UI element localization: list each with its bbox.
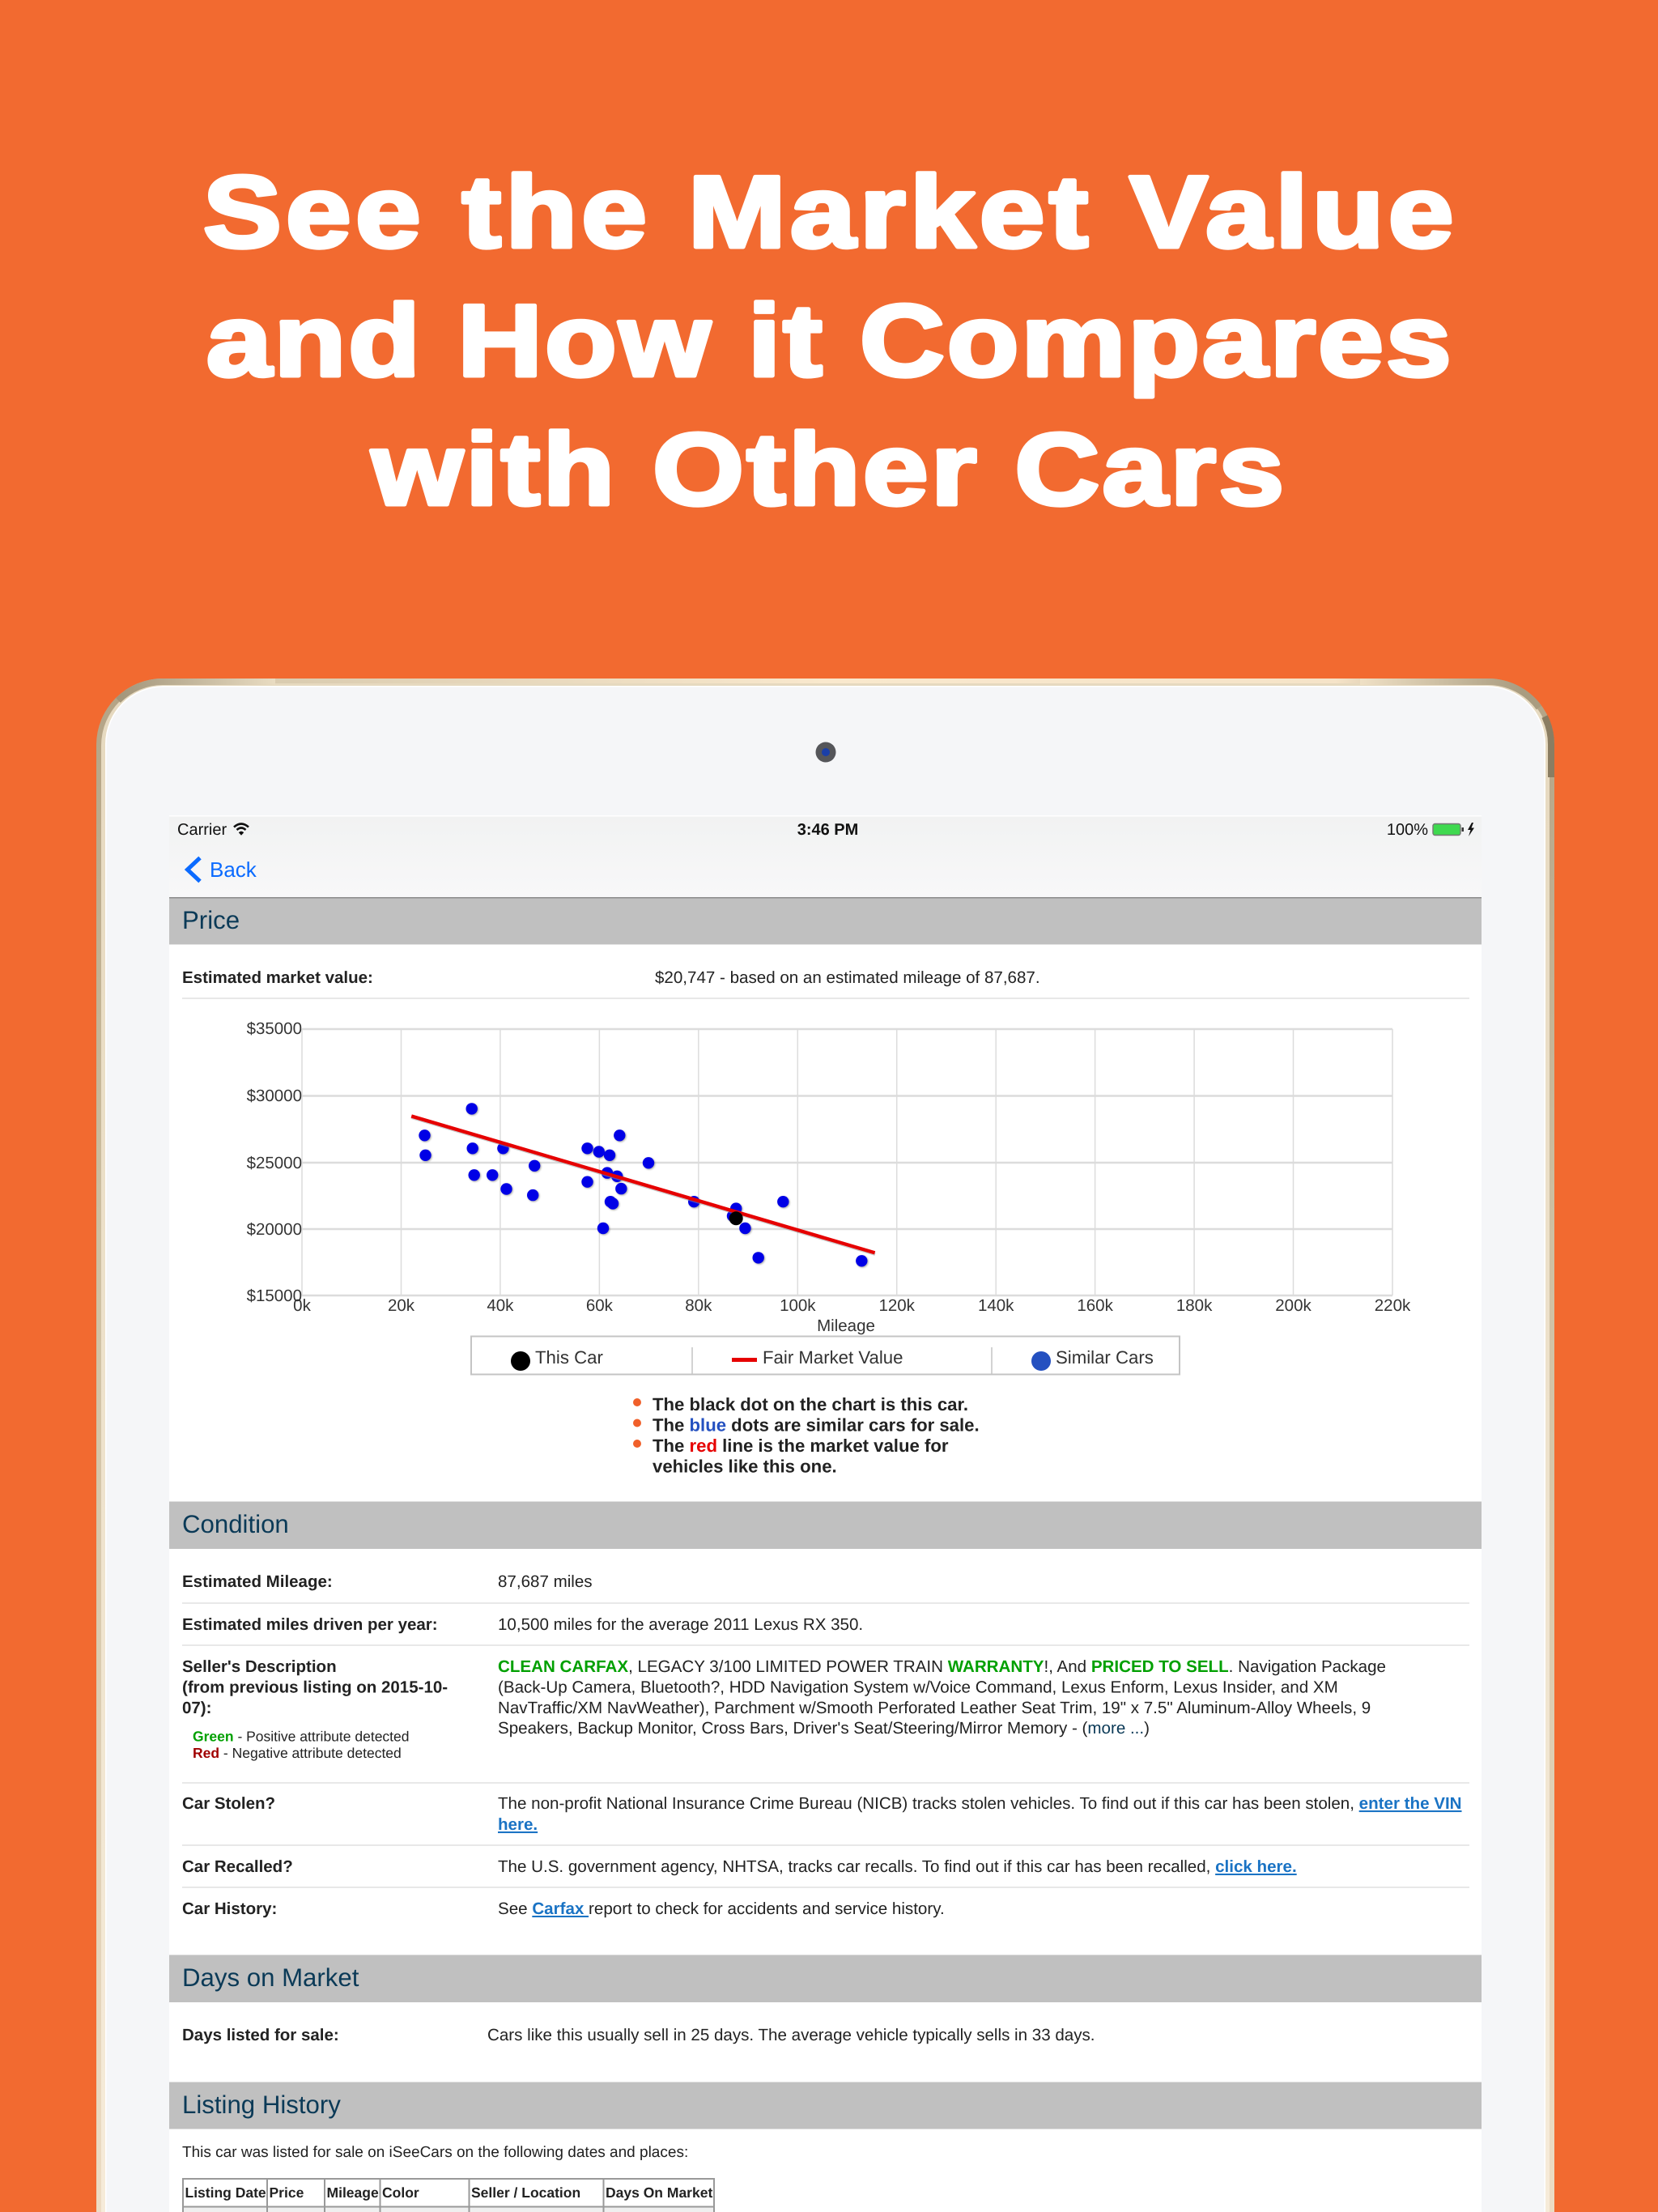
heading: condition: [169, 1501, 1482, 1549]
row: seller's description: 07):: [182, 1699, 211, 1717]
title: [203, 155, 1453, 526]
legend: fair market value: Fair Market Value: [763, 1347, 903, 1368]
x axis labels: 100k: [780, 1296, 816, 1315]
row: car history: Car History:: [182, 1899, 277, 1918]
table header row: Color: [382, 2184, 419, 2201]
x axis labels: [293, 1296, 1411, 1315]
table header row: Mileage: [327, 2184, 379, 2201]
row: miles per year: [182, 1615, 863, 1634]
row: estimated mileage: [182, 1572, 593, 1591]
status: time: 3:46 PM: [797, 821, 858, 839]
chart explanation bullets: The black dot on the chart is this car.: [653, 1394, 968, 1414]
x axis labels: 20k: [388, 1296, 415, 1315]
row: days listed for sale: Days listed for sale:: [182, 2026, 339, 2044]
row: car history: [182, 1899, 945, 1918]
table header row: Listing Date: [185, 2184, 266, 2201]
fair market value line: [411, 1116, 875, 1254]
listing intro text: This car was listed for sale on iSeeCars on the following dates and places:: [182, 2144, 688, 2161]
title: with Other Cars: [371, 412, 1284, 526]
legend: this car: [511, 1347, 603, 1371]
row: seller's description: Seller's Description: [182, 1657, 337, 1676]
x axis labels: 180k: [1176, 1296, 1213, 1315]
row: car history: See Carfax report to check for accidents and service history.: [498, 1899, 945, 1918]
legend: this car: This Car: [535, 1347, 603, 1368]
row: seller's description: (from previous listing on 2015-10-: [182, 1678, 448, 1697]
icon: wifi: [234, 824, 249, 835]
panel: condition: [169, 1501, 1482, 1918]
x axis title: Mileage: [817, 1317, 875, 1335]
x axis labels: 40k: [487, 1296, 514, 1315]
heading: condition: Condition: [182, 1510, 289, 1538]
x axis labels: 200k: [1275, 1296, 1312, 1315]
chart explanation bullets: vehicles like this one.: [653, 1456, 837, 1477]
heading: days on market: Days on Market: [182, 1963, 359, 1992]
row: seller's description: Green - Positive attribute detected: [193, 1728, 410, 1744]
title: See the Market Value: [203, 155, 1453, 269]
icon: front camera: [816, 742, 835, 763]
row: estimated mileage: Estimated Mileage:: [182, 1572, 333, 1591]
this car dot: [729, 1211, 743, 1225]
heading: listing history: [169, 2082, 1482, 2129]
row: days listed for sale: Cars like this usually sell in 25 days. The average vehicle typically sells in 33 days.: [487, 2026, 1095, 2044]
table header row: Seller / Location: [471, 2184, 580, 2201]
estimated market value row: $20,747 - based on an estimated mileage of 87,687.: [655, 968, 1040, 987]
similar cars dots: [419, 1103, 868, 1267]
row: days listed for sale: [182, 2026, 1095, 2044]
chart explanation bullets: The blue dots are similar cars for sale.: [653, 1415, 980, 1435]
heading: price: Price: [182, 906, 240, 934]
row: car recalled: Car Recalled?: [182, 1857, 293, 1876]
row: seller's description: CLEAN CARFAX, LEGACY 3/100 LIMITED POWER TRAIN WARRANTY!, And PRICED TO SELL. Navigation Package: [498, 1657, 1386, 1676]
row: seller's description: Speakers, Backup Monitor, Cross Bars, Driver's Seat/Steering/Mirror Memory - (more ...): [498, 1719, 1150, 1738]
back button: [188, 857, 257, 882]
row: seller's description: [182, 1657, 1386, 1761]
listing history table: [183, 2179, 714, 2212]
y axis labels: $35000: [247, 1019, 302, 1038]
legend: similar cars: Similar Cars: [1056, 1347, 1154, 1368]
status bar and navigation bar: [169, 815, 1482, 899]
table header row: Days On Market: [606, 2184, 712, 2201]
panel: price: [169, 899, 1482, 1477]
table header row: [185, 2184, 712, 2201]
row: car stolen: Car Stolen?: [182, 1794, 275, 1813]
x axis labels: 60k: [586, 1296, 614, 1315]
status: carrier: Carrier: [177, 821, 227, 839]
y axis labels: $30000: [247, 1087, 302, 1105]
table header row: Price: [269, 2184, 304, 2201]
chart legend: [471, 1336, 1180, 1375]
row: seller's description: (Back-Up Camera, Bluetooth?, HDD Navigation System w/Voice Command, Lexus Enform, Lexus Insider, and XM: [498, 1678, 1338, 1697]
tablet device frame: [96, 678, 1554, 2212]
x axis labels: 160k: [1077, 1296, 1114, 1315]
icon: battery: [1433, 823, 1474, 836]
title: and How it Compares: [206, 283, 1452, 398]
back button: Back: [210, 857, 257, 882]
row: seller's description: Red - Negative attribute detected: [193, 1745, 402, 1761]
panel: listing history: [169, 2082, 1482, 2212]
x axis labels: 120k: [878, 1296, 916, 1315]
row: car stolen: The non-profit National Insurance Crime Bureau (NICB) tracks stolen vehicles. To find out if this car has been stolen, enter the VIN: [498, 1794, 1462, 1813]
scatter chart: price vs mileage: [247, 1019, 1411, 1335]
row: estimated mileage: 87,687 miles: [498, 1572, 593, 1591]
y axis labels: $15000: [247, 1287, 302, 1305]
estimated market value row: [182, 968, 1469, 998]
y axis labels: $20000: [247, 1220, 302, 1239]
status: battery percent: 100%: [1387, 821, 1428, 839]
row: miles per year: 10,500 miles for the average 2011 Lexus RX 350.: [498, 1615, 863, 1634]
x axis labels: 0k: [293, 1296, 312, 1315]
x axis labels: 80k: [685, 1296, 712, 1315]
chart explanation bullets: The red line is the market value for: [653, 1436, 949, 1456]
x axis labels: 220k: [1375, 1296, 1411, 1315]
y axis labels: [247, 1019, 302, 1305]
row: car stolen: [182, 1794, 1462, 1834]
heading: price: [169, 899, 1482, 944]
chart explanation bullets: [633, 1394, 980, 1477]
x axis labels: 140k: [978, 1296, 1014, 1315]
row: car recalled: The U.S. government agency, NHTSA, tracks car recalls. To find out if this car has been recalled, click here.: [498, 1857, 1297, 1876]
legend: similar cars: [1031, 1347, 1154, 1371]
estimated market value row: Estimated market value:: [182, 968, 373, 987]
panel: days on market: [169, 1955, 1482, 2044]
y axis labels: $25000: [247, 1154, 302, 1172]
row: seller's description: NavTraffic/XM NavWeather), Parchment w/Smooth Perforated Leather Seat Trim, 19" x 7.5" Aluminum-Alloy Wheels, 9: [498, 1699, 1371, 1717]
row: miles per year: Estimated miles driven per year:: [182, 1615, 438, 1634]
heading: days on market: [169, 1955, 1482, 2002]
screen content background: [169, 899, 1482, 2212]
row: car stolen: here.: [498, 1815, 538, 1834]
heading: listing history: Listing History: [182, 2091, 341, 2119]
